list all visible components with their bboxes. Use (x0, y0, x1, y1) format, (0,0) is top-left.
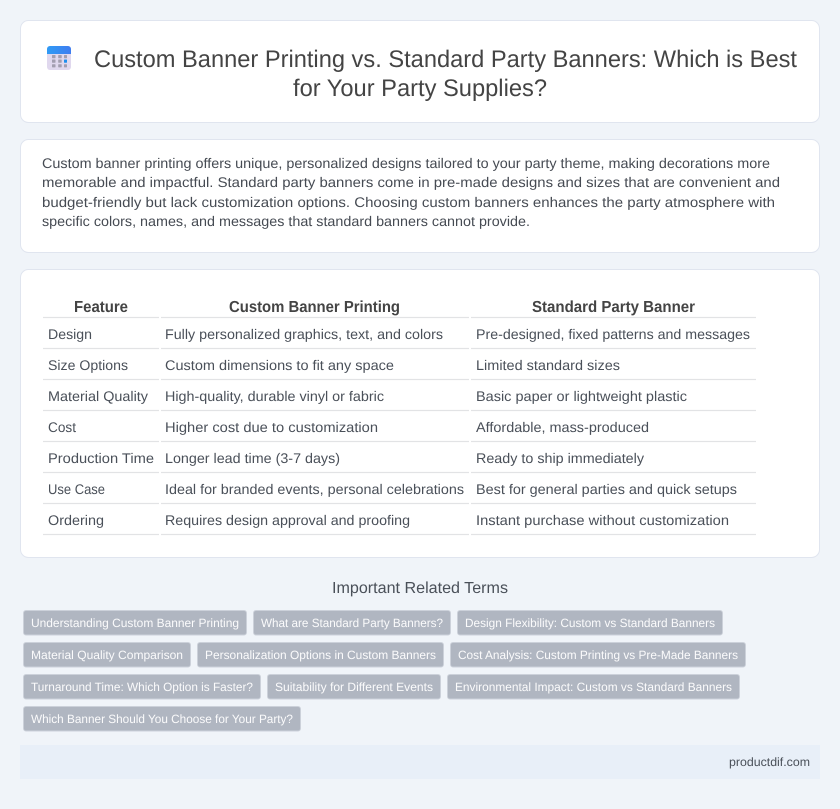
text block: intro: Custom banner printing offers unique, personalized designs tailored to your party theme, making decorations more (42, 155, 770, 171)
tag (198, 642, 444, 667)
tag (24, 642, 190, 667)
panel: title header (20, 20, 820, 122)
table row: cost: Cost (48, 419, 76, 435)
heading: related terms: Important Related Terms (332, 580, 508, 597)
tag (24, 674, 260, 699)
table row: size options: Limited standard sizes (476, 357, 620, 373)
table row: material quality: High-quality, durable vinyl or fabric (165, 388, 384, 404)
tag: Environmental Impact: Custom vs Standard Banners (455, 680, 732, 694)
tag: Cost Analysis: Custom Printing vs Pre-Made Banners (458, 648, 738, 662)
table row: production time (48, 450, 644, 466)
table header: Feature (74, 299, 128, 316)
tag: Turnaround Time: Which Option is Faster? (31, 680, 253, 694)
table row: design (48, 326, 750, 342)
tag (458, 610, 722, 635)
tag: Understanding Custom Banner Printing (31, 616, 239, 630)
panel: intro paragraph (20, 140, 820, 252)
title (94, 46, 797, 102)
table row: material quality (48, 388, 687, 404)
tag: What are Standard Party Banners? (261, 616, 443, 630)
tag: Material Quality Comparison (31, 648, 183, 662)
table row: design: Pre-designed, fixed patterns and messages (476, 326, 750, 342)
table row: design: Design (48, 326, 92, 342)
table row: use case: Ideal for branded events, personal celebrations (165, 481, 464, 497)
text block: intro (42, 155, 780, 229)
table row: use case: Use Case (48, 481, 105, 497)
table header (74, 299, 695, 316)
related term tags (24, 610, 746, 731)
table row: cost (48, 419, 649, 435)
table row: ordering: Requires design approval and proofing (165, 512, 410, 528)
table row: size options: Size Options (48, 357, 128, 373)
table row: material quality: Material Quality (48, 388, 148, 404)
table header: Standard Party Banner (532, 299, 695, 316)
title: for Your Party Supplies? (293, 75, 547, 102)
table row: size options (48, 357, 620, 373)
text block: intro: specific colors, names, and messages that standard banners cannot provide. (42, 213, 530, 229)
panel: comparison table (20, 270, 820, 558)
table row: use case: Best for general parties and quick setups (476, 481, 737, 497)
table row: cost: Higher cost due to customization (165, 419, 378, 435)
table row: cost: Affordable, mass-produced (476, 419, 649, 435)
table row: ordering: Ordering (48, 512, 104, 528)
table header: Custom Banner Printing (229, 299, 400, 316)
table row: production time: Ready to ship immediately (476, 450, 644, 466)
text block: intro: memorable and impactful. Standard party banners come in pre-made designs and sizes that are convenient and (42, 174, 780, 190)
table row: ordering (48, 512, 729, 528)
tag (448, 674, 740, 699)
tag (24, 706, 300, 731)
tag (24, 610, 246, 635)
title: Custom Banner Printing vs. Standard Party Banners: Which is Best (94, 46, 797, 73)
table row: use case (48, 481, 737, 497)
tag: Personalization Options in Custom Banners (205, 648, 436, 662)
tag: Design Flexibility: Custom vs Standard Banners (465, 616, 715, 630)
table row: production time: Longer lead time (3-7 days) (165, 450, 340, 466)
table row: material quality: Basic paper or lightweight plastic (476, 388, 687, 404)
icon: calendar (47, 46, 71, 70)
tag: Which Banner Should You Choose for Your Party? (31, 712, 293, 726)
footer source text: productdif.com (729, 755, 810, 769)
tag: Suitability for Different Events (275, 680, 433, 694)
table row: design: Fully personalized graphics, text, and colors (165, 326, 443, 342)
tag (254, 610, 450, 635)
table row: size options: Custom dimensions to fit any space (165, 357, 394, 373)
table row: ordering: Instant purchase without customization (476, 512, 729, 528)
tag (450, 642, 746, 667)
tag (268, 674, 440, 699)
text block: intro: budget-friendly but lack customization options. Choosing custom banners enhances the party atmosphere with (42, 194, 775, 210)
footer bar (20, 745, 820, 779)
table row: production time: Production Time (48, 450, 154, 466)
